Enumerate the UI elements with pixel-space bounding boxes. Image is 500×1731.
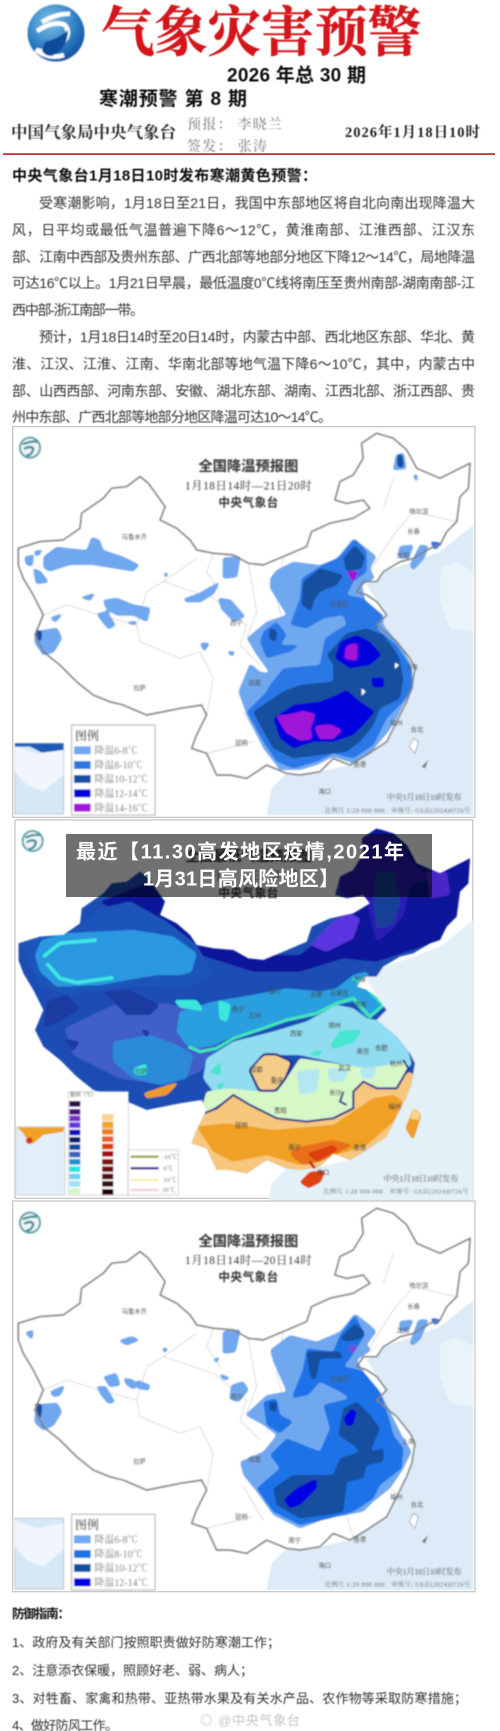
map 1 logo <box>19 437 41 459</box>
map 1 legend: 降温12-14℃ <box>94 787 148 800</box>
map 2 city labels: 成都 <box>250 1065 263 1074</box>
map 3 city labels: 乌鲁木齐 <box>122 1307 148 1316</box>
paragraph 1: 部、江南中西部及贵州东部、广西北部等地部分地区下降12～14℃，局地降温 <box>12 249 475 265</box>
map 2 logo <box>22 830 44 852</box>
map 2 city labels: 福州 <box>388 1101 401 1110</box>
map 3 legend: 降温12-14℃ <box>94 1576 148 1589</box>
issue numbers: 寒潮预警 第 8 期 <box>99 87 247 110</box>
map 3 titles: 全国降温预报图 <box>198 1232 298 1250</box>
map 2 city labels: 南宁 <box>288 1142 301 1151</box>
paragraph 2: 预计，1月18日14时至20日14时，内蒙古中部、西北地区东部、华北、黄 <box>39 329 475 345</box>
issue numbers <box>99 64 366 110</box>
warning text <box>12 166 475 425</box>
map 2 city labels: 武汉 <box>338 1063 352 1072</box>
map 2 city labels: 兰州 <box>248 1011 261 1020</box>
map 1 city labels: 台北 <box>411 725 424 734</box>
map 2 frame <box>15 820 473 1198</box>
paragraph 2: 州中东部、广西北部等地部分地区降温可达10～14℃。 <box>12 409 332 425</box>
map 3 city labels: 香港 <box>353 1535 367 1544</box>
map 3 city labels: 拉萨 <box>133 1456 147 1465</box>
map 1 city labels: 拉萨 <box>133 683 147 692</box>
map 3 footer notes: 比例尺 1:20 000 000 审图号: GS京(2024)0726号 <box>325 1581 470 1589</box>
guide heading: 防御指南： <box>12 1606 70 1621</box>
map 3 titles: 1月18日14时—20日14时 <box>185 1253 312 1267</box>
map 2 city labels: 昆明 <box>235 1122 248 1130</box>
title: 气象灾害预警 <box>101 3 421 63</box>
map 3 city labels: 上海 <box>402 1436 415 1445</box>
map 3 city labels: 长春 <box>407 1301 421 1310</box>
map 1 legend: 降温8-10℃ <box>94 759 143 772</box>
map 2: minimum temperature forecast <box>14 819 474 1200</box>
Taiwan <box>405 1108 421 1141</box>
map 3 logo <box>19 1212 41 1234</box>
paragraph 1 <box>12 195 475 318</box>
map 2 city labels: 杭州 <box>390 1059 403 1068</box>
watermark: ◎ @中央气象台 <box>200 1713 300 1728</box>
paragraph 1: 可达16℃以上。1月21日早晨，最低温度0℃线将南压至贵州南部-湖南南部-江 <box>12 275 475 291</box>
map 1 legend: 图例 <box>75 728 99 743</box>
map 1 city labels: 西宁 <box>230 618 243 627</box>
map 2 inset <box>17 1127 65 1195</box>
map 1 footer notes: 中央1月18日10时发布 <box>387 792 462 802</box>
Hainan <box>299 1170 326 1188</box>
map 3 city labels: 石家庄 <box>330 1374 350 1383</box>
map 1 city labels: 乌鲁木齐 <box>122 532 148 541</box>
map 3 city labels: 昆明 <box>235 1513 248 1521</box>
map 3: temperature drop forecast <box>13 1201 475 1592</box>
map 2 title: 1月21日早晨 <box>198 870 298 883</box>
map 2 geography <box>17 828 474 1200</box>
map 3 titles <box>185 1232 312 1284</box>
guide items <box>12 1635 467 1731</box>
issuer signature: 签发： 张涛 <box>187 138 267 155</box>
map 1 titles <box>185 457 312 509</box>
map 1 geography <box>18 433 473 815</box>
map 2 footer notes <box>323 1174 468 1195</box>
map 1 city labels: 哈尔滨 <box>409 506 429 515</box>
headline overlay banner <box>66 834 432 897</box>
map 1 city labels: 昆明 <box>235 739 248 747</box>
guide items: 2、注意添衣保暖，照顾好老、弱、病人； <box>12 1663 253 1679</box>
map 3 footer notes <box>325 1566 470 1589</box>
map 3 legend: 降温8-10℃ <box>94 1548 143 1561</box>
map 2 city labels: 拉萨 <box>135 1066 148 1075</box>
map 2 city labels: 重庆 <box>271 1076 284 1085</box>
map 2 isotherm legend: -10℃ <box>162 1153 178 1161</box>
map 2 city labels: 郑州 <box>328 1022 341 1030</box>
map 1 legend: 降温6-8℃ <box>94 744 138 757</box>
map 1 legend: 降温14-16℃ <box>94 801 148 814</box>
map 3 city labels: 海口 <box>318 1561 331 1570</box>
map 1 titles: 中央气象台 <box>218 495 278 509</box>
map 1 city labels: 长春 <box>407 526 421 535</box>
map 1 city labels: 沈阳 <box>397 551 409 560</box>
temperature fields <box>17 828 472 1174</box>
map 1 city labels: 石家庄 <box>330 600 350 609</box>
guide items: 1、政府及有关部门按照职责做好防寒潮工作； <box>12 1635 280 1651</box>
map 2 city labels: 济南 <box>354 999 367 1008</box>
map 1: temperature drop forecast <box>13 427 475 817</box>
map 2 title <box>185 847 312 900</box>
map 3 titles: 中央气象台 <box>218 1270 278 1284</box>
map 3 legend: 图例 <box>75 1517 99 1532</box>
map 1 footer notes <box>325 792 470 814</box>
map 3 footer notes: 中央1月18日10时发布 <box>387 1566 462 1576</box>
map 2 isotherm legend <box>128 1150 178 1195</box>
map 2 title: 中央气象台 <box>218 886 278 900</box>
banner text: 最近【11.30高发地区疫情,2021年 <box>76 840 404 864</box>
map 3 frame <box>13 1201 475 1592</box>
paragraph 1: 风，日平均或最低气温普遍下降6～12℃，黄淮南部、江淮西部、江汉东 <box>12 222 475 238</box>
map 2 city labels: 西安 <box>290 1029 303 1038</box>
map 2 city labels: 银川 <box>268 986 281 995</box>
map 1 titles: 全国降温预报图 <box>198 457 298 475</box>
map 1 city labels: 上海 <box>405 662 418 671</box>
map 3 city labels: 成都 <box>248 1455 262 1464</box>
issuer: 中国气象局中央气象台 <box>11 122 176 142</box>
banner text <box>76 840 404 890</box>
banner text: 1月31日高风险地区】 <box>143 866 339 890</box>
map 1 inset <box>15 743 64 814</box>
map 1 city labels: 成都 <box>248 678 262 687</box>
map 3 city labels: 南宁 <box>288 1535 301 1544</box>
map 2 city labels: 太原 <box>310 990 323 999</box>
map 3 inset <box>15 1518 64 1589</box>
defense guide <box>12 1606 467 1731</box>
map 2 city labels: 贵阳 <box>274 1105 287 1114</box>
forecaster: 预报： 李晓兰 <box>187 116 282 133</box>
map 2 isotherm legend: 20℃ <box>162 1186 176 1194</box>
map 2 footer notes: 比例尺 1:20 000 000 审图号: GS京(2024)0726号 <box>323 1187 468 1195</box>
paragraph 1: 西中部-浙江南部一带。 <box>12 302 144 318</box>
paragraph 2: 淮、江汉、江淮、江南、华南北部等地气温下降6～10℃，其中，内蒙古中 <box>12 356 475 372</box>
map 2 city labels: 香港 <box>353 1142 367 1151</box>
map 2 footer notes: 中央1月18日10时发布 <box>383 1174 458 1184</box>
map 3 city labels: 西宁 <box>231 1392 243 1401</box>
map 1 titles: 1月18日14时—21日20时 <box>185 479 312 493</box>
map 2 city labels <box>135 976 403 1176</box>
map 3 legend: 降温10-12℃ <box>94 1562 148 1575</box>
map 3 city labels: 台北 <box>411 1500 424 1509</box>
guide items: 3、对牲畜、家禽和热带、亚热带水果及有关水产品、农作物等采取防寒措施； <box>12 1691 467 1707</box>
paragraph 2 <box>12 329 475 425</box>
map 1 city labels: 海口 <box>318 786 331 795</box>
icon: meteorological logo <box>28 4 84 62</box>
map 3 city labels: 福州 <box>390 1492 403 1501</box>
map 2 city labels: 石家庄 <box>330 988 350 997</box>
map 2 isotherm legend: 10℃ <box>163 1176 177 1184</box>
map 1 legend <box>72 725 155 815</box>
map 1 footer notes: 比例尺 1:20 000 000 审图号: GS京(2024)0726号 <box>325 806 470 814</box>
warning heading: 中央气象台1月18日10时发布寒潮黄色预警： <box>12 166 317 184</box>
map 1 city labels <box>122 506 429 795</box>
map 3 geography <box>18 1208 473 1590</box>
map 1 city labels: 香港 <box>353 760 367 769</box>
paragraph 1: 受寒潮影响，1月18日至21日，我国中东部地区将自北向南出现降温大 <box>39 195 475 211</box>
map 3 city labels <box>122 1281 429 1570</box>
map 2 city labels: 长沙 <box>329 1087 343 1096</box>
map 2 isotherm legend: 0℃ <box>163 1164 174 1172</box>
map 1 legend: 降温10-12℃ <box>94 773 148 786</box>
header: logo and red title <box>28 3 421 63</box>
map 1 city labels: 福州 <box>390 718 403 727</box>
map 2 legend <box>68 1091 128 1195</box>
map 2 city labels: 合肥 <box>375 1043 388 1052</box>
map 2 city labels: 海口 <box>317 1167 329 1176</box>
map 2 city labels: 西宁 <box>232 1005 244 1014</box>
issue date: 2026年1月18日10时 <box>345 123 480 141</box>
banner background <box>66 834 432 897</box>
map 2 title: 全国最低气温预报图 <box>185 847 312 865</box>
map 2 legend: 图例（℃） <box>70 1091 97 1099</box>
red rule <box>3 153 495 155</box>
map 3 legend: 降温6-8℃ <box>94 1533 138 1546</box>
issue numbers: 2026 年总 30 期 <box>227 64 366 86</box>
map 1 frame <box>13 427 475 817</box>
issuer row <box>11 116 480 155</box>
map 2 city labels: 南京 <box>357 1046 369 1055</box>
map 3 city labels: 哈尔滨 <box>409 1281 429 1290</box>
map 3 legend <box>72 1514 155 1590</box>
map 3 city labels: 沈阳 <box>397 1325 409 1334</box>
map 2 city labels: 天津 <box>353 976 367 984</box>
paragraph 2: 部、山西西部、河南东部、安徽、湖北东部、湖南、江西北部、浙江西部、贵 <box>12 383 475 399</box>
